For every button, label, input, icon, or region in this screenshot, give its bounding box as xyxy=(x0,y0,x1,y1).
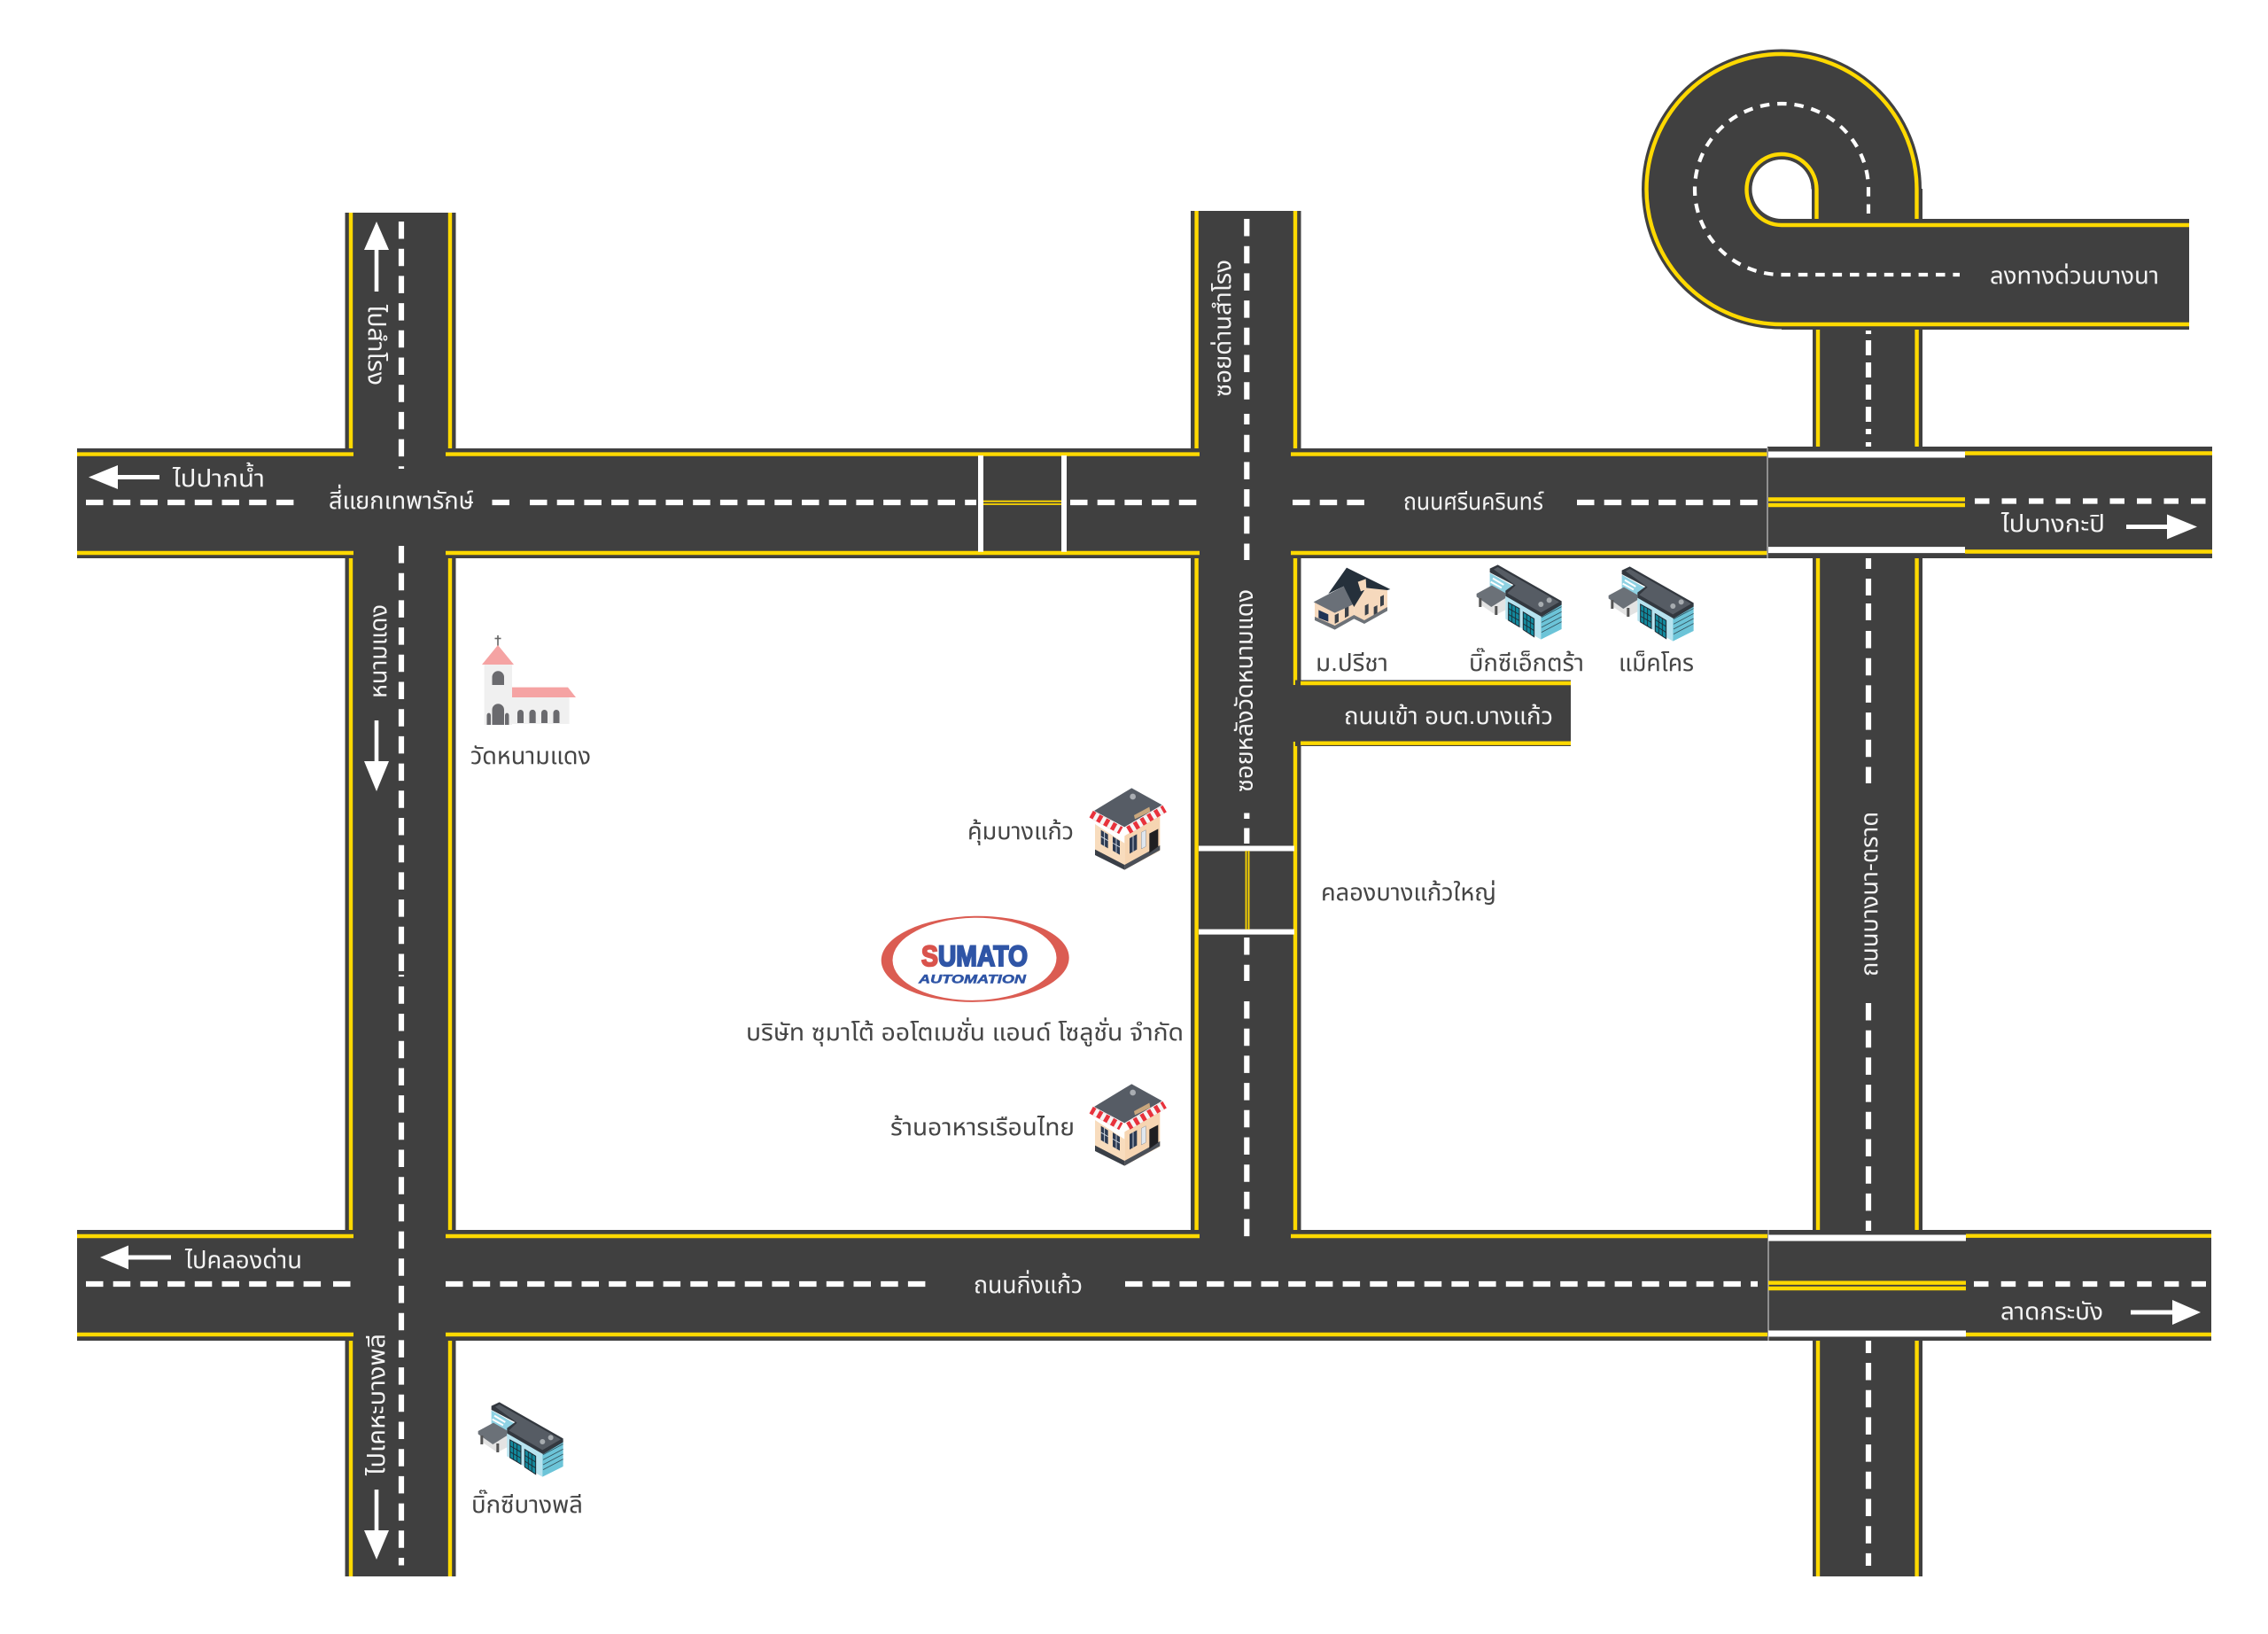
label: คุ้มบางแก้ว: คุ้มบางแก้ว xyxy=(967,818,1074,845)
road: ซอยหลังวัดหนามแดง xyxy=(1191,211,1301,1239)
label: บิ๊กซีเอ็กตร้า: บิ๊กซีเอ็กตร้า xyxy=(1469,648,1584,676)
road: ถนนกิ่งแก้ว xyxy=(77,1230,1767,1341)
icon: shop คุ้มบางแก้ว xyxy=(1091,788,1165,870)
overpass: คลองบางแก้วใหญ่ xyxy=(1199,849,1294,932)
icon: building บิ๊กซีเอ็กตร้า xyxy=(1477,564,1562,640)
label: ถนนกิ่งแก้ว: ถนนกิ่งแก้ว xyxy=(974,1270,1083,1298)
arrow: ไปเคหะบางพลี xyxy=(364,1490,389,1560)
logo: SUMATO AUTOMATION xyxy=(881,914,1070,1004)
overpass: ถนนกิ่งแก้ว ขวา xyxy=(1767,1230,2211,1341)
label: สี่แยกเทพารักษ์: สี่แยกเทพารักษ์ xyxy=(329,484,474,514)
road: ถนนบางนา-ตราด xyxy=(1813,189,1922,1576)
label: ถนนเข้า อบต.บางแก้ว: ถนนเข้า อบต.บางแก้ว xyxy=(1344,703,1553,729)
label: บิ๊กซีบางพลี: บิ๊กซีบางพลี xyxy=(471,1490,583,1518)
icon: building แม็คโคร xyxy=(1609,566,1694,642)
lane dashes xyxy=(86,219,2206,1566)
road: แนวตั้ง สี่แยกเทพารักษ์ xyxy=(346,213,455,1576)
label: ไปคลองด่าน: ไปคลองด่าน xyxy=(184,1247,302,1273)
label: หนามแดง: หนามแดง xyxy=(365,604,392,698)
arrow: ไปบางกะปิ xyxy=(2126,514,2197,539)
label: ไปปากน้ำ: ไปปากน้ำ xyxy=(172,462,265,492)
label: ซอยหลังวัดหนามแดง: ซอยหลังวัดหนามแดง xyxy=(1231,589,1258,792)
arrow: ไปคลองด่าน xyxy=(100,1246,171,1269)
arrow: ลาดกระบัง xyxy=(2131,1300,2201,1325)
road: ถนนเข้า อบต.บางแก้ว xyxy=(1295,681,1571,746)
label: ถนนศรีนครินทร์: ถนนศรีนครินทร์ xyxy=(1403,488,1544,515)
label: ม.ปรีชา: ม.ปรีชา xyxy=(1316,650,1388,676)
label: ร้านอาหารเรือนไทย: ร้านอาหารเรือนไทย xyxy=(890,1114,1075,1140)
label: แม็คโคร: แม็คโคร xyxy=(1619,650,1694,676)
label: company name: บริษัท ซุมาโต้ ออโตเมชั่น แอนด์ โซลูชั่น จำกัด xyxy=(746,1017,1184,1047)
overpass: สะพานบนถนนศรีนครินทร์ xyxy=(981,455,1064,552)
icon: house ม.ปรีชา xyxy=(1314,568,1390,630)
arrow: หนามแดง xyxy=(364,720,389,791)
overpass: ถนนศรีนครินทร์ ขวา xyxy=(1767,447,2212,558)
label: วัดหนามแดง: วัดหนามแดง xyxy=(470,743,591,769)
arrow: ไปปากน้ำ xyxy=(89,465,159,489)
label: ถนนบางนา-ตราด: ถนนบางนา-ตราด xyxy=(1856,812,1883,977)
label: ลงทางด่วนบางนา: ลงทางด่วนบางนา xyxy=(1990,262,2159,289)
label: ลาดกระบัง: ลาดกระบัง xyxy=(2000,1298,2103,1325)
road: ถนนศรีนครินทร์ xyxy=(77,448,1767,558)
label: ไปเคหะบางพลี: ไปเคหะบางพลี xyxy=(363,1334,390,1476)
icon: shop ร้านอาหารเรือนไทย xyxy=(1091,1084,1165,1166)
road: loop ลงทางด่วนบางนา xyxy=(1642,50,2189,330)
logo: SUMATO AUTOMATION: SUMATO xyxy=(921,940,1028,972)
label: ซอยด่านสำโรง: ซอยด่านสำโรง xyxy=(1209,260,1236,397)
label: ไปสำโรง: ไปสำโรง xyxy=(363,304,390,385)
arrow: ไปสำโรง xyxy=(364,222,389,292)
icon: church xyxy=(482,635,576,725)
icon: building บิ๊กซีบางพลี xyxy=(478,1402,563,1477)
label: ไปบางกะปิ: ไปบางกะปิ xyxy=(2000,510,2105,537)
label: คลองบางแก้วใหญ่: คลองบางแก้วใหญ่ xyxy=(1321,879,1496,906)
logo: SUMATO AUTOMATION: AUTOMATION xyxy=(918,973,1026,985)
